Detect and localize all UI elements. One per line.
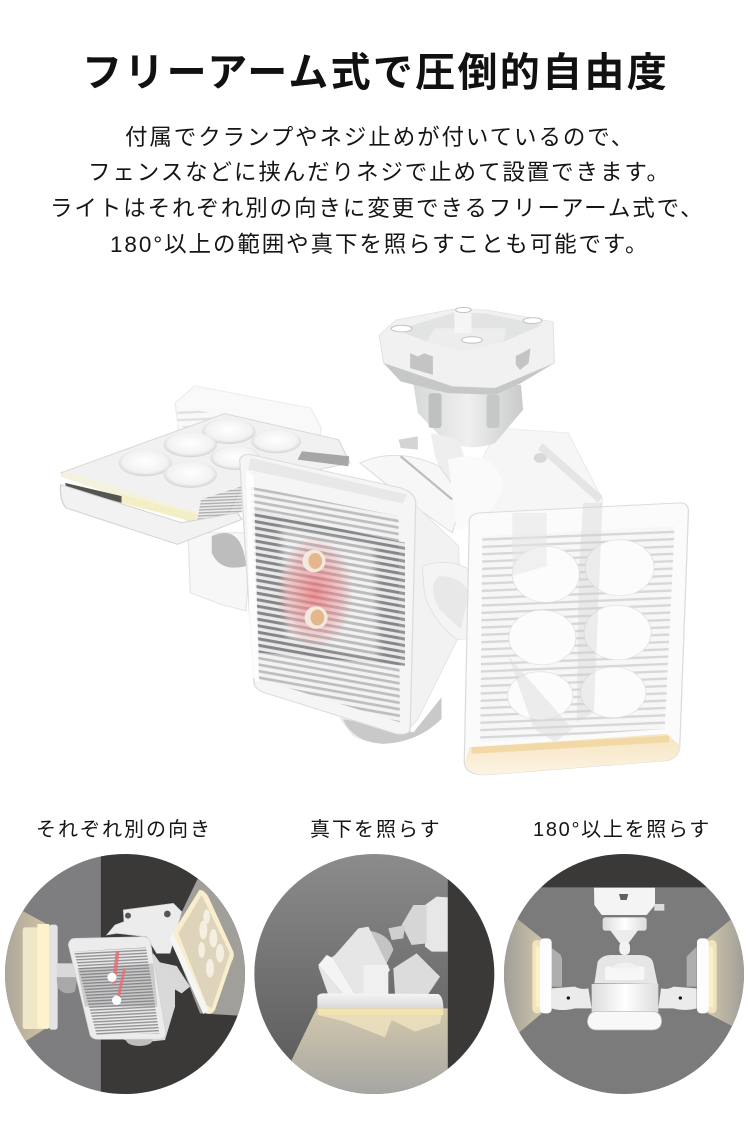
wall bracket: [107, 903, 182, 953]
light beam: [292, 1008, 448, 1095]
caption: each direction: それぞれ別の向き: [36, 818, 212, 841]
right translucent lamp: [464, 503, 688, 775]
intro text block: ライトはそれぞれ別の向きに変更できるフリーアーム式で、: [50, 196, 705, 221]
center lamp panel with sensor: [240, 454, 416, 734]
downward lamp: [317, 993, 443, 1037]
right arm: [157, 962, 190, 993]
circle photo 3: over 180 degrees: [502, 853, 747, 1096]
circle photo 2: lighting straight down: [253, 853, 498, 1095]
central body: [587, 955, 662, 1030]
side light beams: [502, 918, 542, 1033]
caption: straight down: 真下を照らす: [310, 818, 442, 841]
title: フリーアーム式で圧倒的自由度: [82, 51, 669, 95]
product illustration: free-arm light: [59, 307, 688, 775]
left lamp: [23, 924, 78, 1030]
left arm and lamp: [532, 938, 592, 1013]
right arm and lamp: [658, 938, 717, 1013]
mounting base: [594, 888, 664, 955]
center lamp body: [341, 500, 487, 744]
intro text block: 付属でクランプやネジ止めが付いているので、: [125, 125, 635, 150]
center panel: [124, 954, 175, 1042]
neck and ball joint: [360, 385, 523, 533]
ghost rear lamp: [175, 386, 321, 466]
circle photo 1: lamps facing different directions: [5, 854, 245, 1094]
right lamp: [169, 890, 234, 1014]
intro text block: 180°以上の範囲や真下を照らすことも可能です。: [110, 232, 649, 257]
LED lenses: [508, 540, 654, 720]
light beams: [178, 879, 245, 1016]
rear bracket: [478, 428, 603, 519]
folded lamp body: [318, 927, 440, 995]
mounting base: [379, 307, 554, 395]
intro text block: フェンスなどに挟んだりネジで止めて設置できます。: [88, 160, 671, 185]
intro text block: [50, 125, 705, 257]
wall bracket and arm: [370, 896, 448, 964]
caption: over 180 degrees: 180°以上を照らす: [533, 818, 711, 841]
left lamp: [59, 414, 350, 611]
